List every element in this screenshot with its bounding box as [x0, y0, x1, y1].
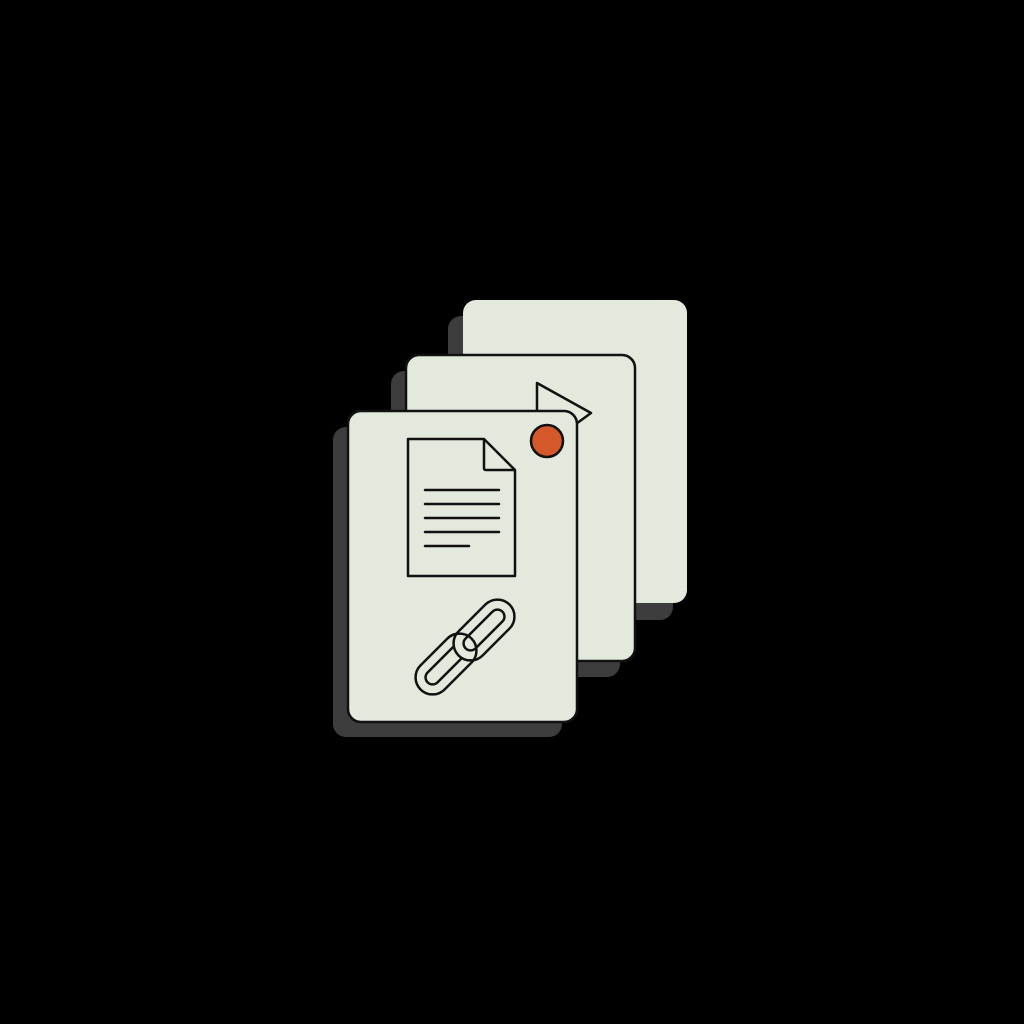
- middle card: [391, 355, 635, 677]
- front card: [333, 411, 577, 737]
- overlap of first link over second: [447, 627, 483, 663]
- icon: flag triangle: [537, 383, 591, 432]
- icon: document: [408, 439, 515, 576]
- back card: [448, 300, 687, 620]
- icon: orange dot: [531, 425, 563, 457]
- icon: chain link: [409, 593, 521, 701]
